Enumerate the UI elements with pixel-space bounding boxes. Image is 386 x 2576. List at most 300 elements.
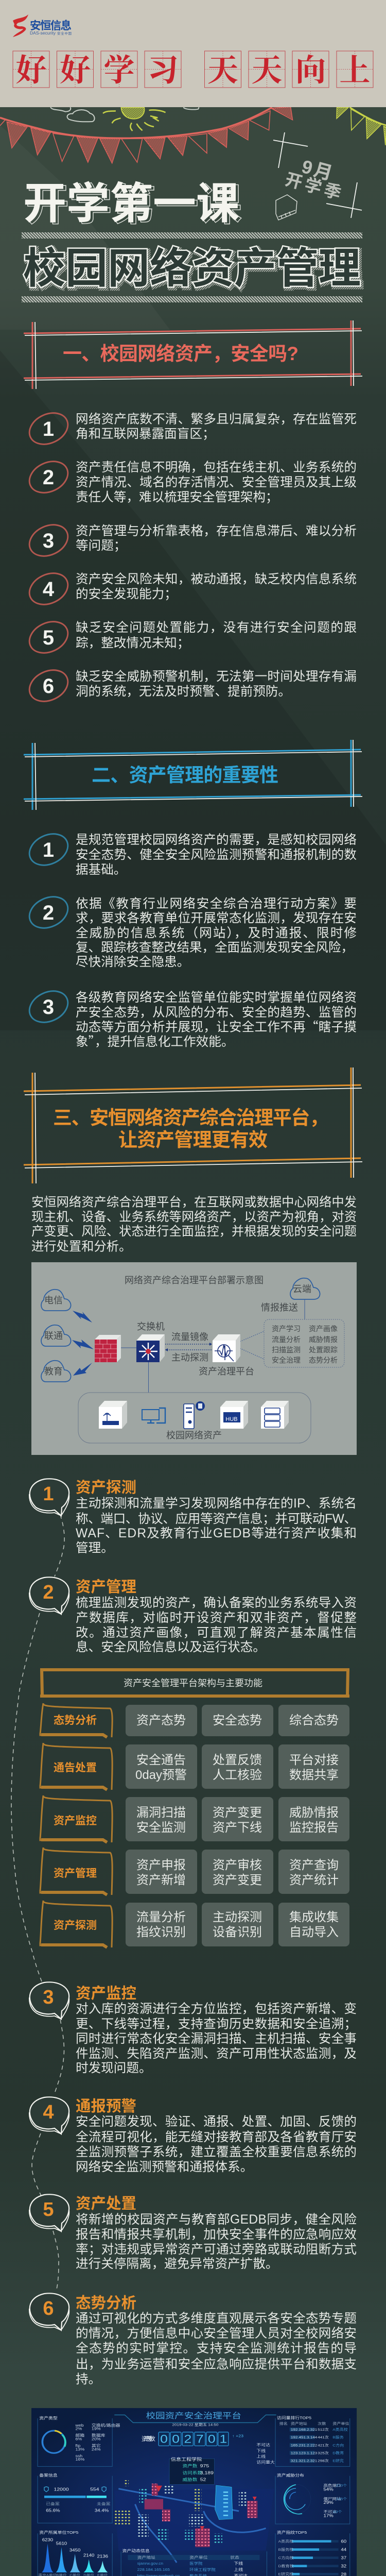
sun: [103, 107, 166, 131]
title banner: [114, 2411, 276, 2427]
item: 资产监控: [29, 1982, 357, 2075]
icon: speech bubble 5: 5: [43, 2199, 54, 2221]
icon: switch: [136, 1321, 165, 1362]
chalk divider bottom: [22, 296, 362, 302]
logo: 安恒信息: [30, 19, 72, 32]
map legend: 访问量大: [256, 2460, 275, 2464]
title: 校园网络资产管理: 校园网络资产管理: [23, 245, 361, 292]
item: 资产探测: 管理。: [76, 1541, 114, 1555]
item 6: 洞的系统，无法及时预警、提前预防。: [76, 684, 291, 699]
panel: visits top 5: [275, 2415, 350, 2466]
panel: filing info: 备案信息: [39, 2473, 58, 2478]
icon: desktop PC: [142, 1408, 165, 1423]
map legend: 不可达: [256, 2443, 270, 2447]
asset counter: 0: [172, 2433, 180, 2446]
intro text: [31, 1195, 357, 1254]
panel: filing info: 34.4%: [95, 2508, 109, 2513]
item: 态势分析: 的情况，方便信息中心安全管理人员对全校网络安: [76, 2326, 357, 2341]
item: 资产监控: 资产监控: [76, 1985, 136, 2002]
item: 资产处置: 报告和情报共享机制，加快安全事件的应急响应效: [76, 2227, 357, 2242]
panel: fingerprint top 5: 32: [341, 2564, 346, 2568]
panel: asset types: 16%: [75, 2458, 84, 2462]
panel: asset types: ftp: [75, 2444, 81, 2448]
row: 资产监控: 监控报告: [289, 1821, 339, 1835]
intro text: 产变更、风险、状态进行全面监控，并根据发现的安全问题: [31, 1225, 357, 1239]
item: 通报预警: 全监测预警子系统，建立覆盖全校重要信息系统的: [76, 2145, 357, 2159]
item: 通报预警: 全流程可视化，能无缝对接教育部及各省教育厅安: [76, 2130, 357, 2144]
slogan grid: 上: [340, 46, 371, 90]
popup card: 信息工程学院: [171, 2456, 202, 2462]
item 1: 是规范管理校园网络资产的需要，是感知校园网络: [76, 833, 357, 847]
slogan grid: [13, 46, 373, 90]
season badge with chalk crosses: [273, 132, 362, 220]
item 1: 网络资产底数不清、繁多且归属复杂，存在监管死: [76, 412, 357, 427]
panel: filing info: 已备案: [46, 2501, 60, 2506]
item 4: 4: [43, 578, 55, 601]
panel: asset activity table: sjanrw.gov.cn: [137, 2562, 163, 2566]
top paper band: [0, 0, 386, 107]
panel: visits top 5: B服务: [332, 2435, 344, 2439]
panel: filing info: 65.6%: [46, 2508, 60, 2513]
panel: threat distribution: 资产威胁分布: [277, 2473, 304, 2478]
icon: hub: [220, 1401, 248, 1429]
panel: fingerprint top 5: C方向校: [278, 2556, 294, 2560]
icon: wireless router: [99, 1401, 127, 1429]
panel: asset types: 24%: [92, 2447, 101, 2451]
item 1: [24, 407, 357, 450]
chalk divider top: [22, 232, 362, 239]
panel: threat distribution: [275, 2473, 350, 2524]
icon: speech bubble 3: [29, 1982, 69, 2019]
panel: unit top 5: 6230: [42, 2537, 53, 2542]
item 2: 复、跟踪核查整改结果，全面监测发现安全风险，: [76, 940, 354, 955]
icon: speech bubble 5: [29, 2194, 69, 2231]
row: 资产管理: 资产审核: [213, 1858, 262, 1872]
item: 资产处置: 将新增的校园资产与教育部GEDB同步，健全风险: [76, 2212, 357, 2227]
row: 态势分析: 安全态势: [213, 1714, 262, 1727]
icon: pointing hand: [276, 195, 297, 220]
panel: fingerprint top 5: 44: [341, 2547, 346, 2552]
item: 资产处置: 资产处置: [76, 2195, 136, 2212]
item: 态势分析: 全态势的实时掌控。支持安全监测统计报告的导: [76, 2341, 357, 2355]
item: 资产监控: 对入库的资源进行全方位监控，包括资产新增、变: [76, 2002, 357, 2016]
title: 校园网络资产管理: 校园网络资产管理: [25, 247, 362, 294]
panel: threat distribution: 145个: [336, 2497, 347, 2501]
row: 资产监控: 资产变更: [213, 1806, 262, 1820]
chart: deployment diagram: [31, 1262, 357, 1455]
red pennants: [0, 107, 292, 163]
icon: asset platform: 资产治理平台: [199, 1366, 254, 1377]
panel: visits top 5: 资产单位: [332, 2421, 349, 2426]
slogan grid: 天: [251, 46, 282, 90]
asset counter: 0: [160, 2433, 168, 2446]
icon: speech bubble 2: [29, 1577, 69, 1614]
item: 资产管理: 息、安全风险信息以及运行状态。: [76, 1640, 266, 1654]
heading: section 1: 一、校园网络资产，安全吗?: [63, 343, 299, 364]
panel: threat distribution: 54%: [324, 2487, 334, 2492]
row: 态势分析: [40, 1703, 349, 1737]
campus assets group: [78, 1393, 311, 1443]
panel: fingerprint top 5: 资产指纹TOP5: [277, 2530, 307, 2535]
slogan grid: 好: [60, 46, 91, 90]
title banner: 2019-03-22 星期五 14:50: [172, 2422, 218, 2427]
row: 资产探测: [40, 1901, 349, 1947]
icon: speech bubble 3: 3: [43, 1987, 54, 2008]
panel: asset activity table: 资产地址: [137, 2555, 155, 2560]
title: 开学第一课: 开学第一课: [23, 179, 239, 228]
panel: unit top 5: 5610: [56, 2541, 67, 2546]
item: 资产管理: 产数据库，对临时开设资产和双非资产，督促整: [76, 1611, 357, 1625]
slogan grid: 学: [104, 46, 135, 90]
dashed timeline: [11, 1515, 64, 2292]
item 2: [24, 891, 357, 969]
city view: [114, 2480, 274, 2563]
icon: speech bubble 1: [29, 1479, 69, 1516]
panel: fingerprint top 5: D教育校: [278, 2564, 294, 2568]
red string: [0, 107, 272, 138]
item 3: 等问题；: [76, 538, 126, 553]
popup card: [169, 2456, 215, 2484]
panel: asset activity table: 资产动态信息: [122, 2548, 150, 2553]
cloud labels: 电信: [44, 1295, 63, 1306]
panel: visits top 5: C方向: [332, 2443, 344, 2447]
item 2: 2: [43, 902, 54, 924]
row: 通告处置: 通告处置: [54, 1762, 97, 1774]
popup card: 3,189: [200, 2470, 214, 2476]
item: 态势分析: 持。: [76, 2372, 101, 2386]
row: 通告处置: 0day预警: [135, 1768, 187, 1782]
panel: unit top 5: 2136: [97, 2554, 108, 2558]
popup card: 975: [200, 2464, 209, 2469]
row: 资产探测: 设备识别: [213, 1925, 262, 1939]
logo: [13, 14, 72, 37]
item: 态势分析: 态势分析: [76, 2295, 136, 2312]
item: 态势分析: 通过可视化的方式多维度直观展示各安全态势专题: [76, 2311, 357, 2326]
panel: threat distribution: 不可达: [324, 2509, 337, 2514]
row: 资产管理: [40, 1848, 349, 1895]
panel: asset types: 数据库: [92, 2433, 105, 2437]
item 3: [24, 519, 357, 562]
heading frame: section 3: [24, 1067, 362, 1183]
panel: unit top 5: 资产所属单位TOP5: [39, 2530, 79, 2535]
item: 资产管理: 梳理监测发现的资产，确认备案的业务系统导入资: [76, 1596, 357, 1610]
panel: asset activity table: 环境工程学院: [189, 2567, 216, 2572]
item 2: 2: [43, 466, 54, 489]
feature box: 扫描监测: [272, 1346, 301, 1354]
logo: 安全中国: [57, 31, 72, 36]
item 1: 据基础。: [76, 862, 126, 877]
item 2: 资产责任信息不明确，包括在线主机、业务系统的: [76, 460, 357, 474]
feature box: 处置跟踪: [309, 1346, 338, 1354]
item 2: [24, 455, 357, 504]
title: 开学第一课: 开学第一课: [26, 181, 242, 229]
panel: threat distribution: 高危端口: [324, 2483, 341, 2487]
panel: asset activity table: 医学院: [189, 2561, 203, 2566]
item 2: 依据《教育行业网络安全综合治理行动方案》要: [76, 896, 357, 911]
row: 资产管理: 资产变更: [213, 1873, 262, 1887]
panel: asset types: web: [75, 2424, 84, 2428]
icon: speech bubble 6: [29, 2293, 69, 2330]
feature box: 资产学习: [272, 1325, 301, 1333]
popup card: 访问系数: [182, 2470, 202, 2475]
panel: visits top 5: 192.168.2.321: [291, 2428, 317, 2432]
heading frame: section 2: [24, 740, 362, 810]
item: 资产探测: 主动探测和流量学习发现网络中存在的IP、系统名: [76, 1496, 357, 1511]
item 1: [24, 828, 357, 877]
item: 通报预警: 通报预警: [76, 2098, 136, 2115]
row: 资产探测: 主动探测: [213, 1910, 262, 1924]
panel: fingerprint top 5: B服务校: [278, 2548, 294, 2552]
row: 资产管理: 资产新增: [136, 1873, 186, 1887]
panel: visits top 5: 298次: [318, 2459, 329, 2463]
icon: asset platform: [199, 1334, 254, 1377]
item 3: 产安全态势，从风险的分布、安全的趋势、监管的: [76, 1005, 357, 1020]
row: 资产管理: 资产统计: [289, 1873, 339, 1887]
slogan grid: 向: [295, 46, 326, 90]
panel: asset activity table: 资产单位: [189, 2555, 208, 2560]
row: 资产管理: 资产管理: [54, 1868, 97, 1879]
heading: section 3: 让资产管理更有效: [118, 1129, 268, 1150]
panel: visits top 5: 441次: [318, 2435, 329, 2439]
heading: section 2: 二、资产管理的重要性: [92, 765, 278, 786]
item: 资产探测: 称、端口、协议、应用等资产信息；并可联动FW、: [76, 1512, 357, 1526]
chart: deployment diagram: 网络资产综合治理平台部署示意图: [125, 1275, 264, 1285]
icon: lightning bolts: [72, 1311, 94, 1376]
row: 资产监控: 威胁情报: [289, 1806, 339, 1820]
clouds: [50, 107, 199, 122]
panel: fingerprint top 5: [275, 2530, 350, 2576]
icon: speech bubble 4: 4: [43, 2102, 54, 2123]
row: 通告处置: 数据共享: [289, 1768, 339, 1782]
panel: visits top 5: 123.123.1.123: [291, 2451, 317, 2455]
icon: hub: HUB: [225, 1416, 238, 1422]
item: 通报预警: 安全问题发现、验证、通报、处置、加固、反馈的: [76, 2114, 357, 2129]
item 3: 资产管理与分析靠表格，存在信息滞后、难以分析: [76, 523, 357, 538]
panel: architecture table: [40, 1670, 349, 1947]
cloud labels: 教育: [44, 1366, 63, 1377]
panel: asset types: 20%: [92, 2437, 101, 2441]
item: 资产探测: WAF、EDR及教育行业GEDB等进行资产收集和: [76, 1526, 357, 1540]
feature box: [264, 1319, 344, 1367]
item 2: 责任人等，难以梳理安全管理架构；: [76, 490, 278, 504]
item: 态势分析: 出，为业务运营和安全应急响应提供平台和数据支: [76, 2357, 357, 2371]
panel: visits top 5: 192.451.3.144: [291, 2435, 317, 2439]
panel: visits top 5: 325次: [318, 2451, 329, 2455]
item 5: [24, 616, 357, 659]
heading: section 3: [53, 1107, 328, 1150]
map legend: [256, 2443, 275, 2464]
panel: visits top 5: 421次: [318, 2443, 329, 2447]
item 2: 资产情况、域名的存活情况、安全管理员及其上级: [76, 475, 357, 489]
row: 态势分析: 综合态势: [289, 1714, 339, 1727]
item 3: 3: [43, 996, 54, 1019]
icon: speech bubble 4: [29, 2097, 69, 2134]
panel: asset types: 6%: [75, 2437, 82, 2441]
traffic labels: 流量镜像: [171, 1332, 208, 1342]
table header: 资产安全管理平台架构与主要功能: [124, 1678, 262, 1688]
heading frame: section 1: [24, 320, 362, 389]
item 3: 各级教育网络安全监管单位能实时掌握单位网络资: [76, 990, 357, 1005]
asset counter: 2: [184, 2433, 191, 2446]
chalkboard diagonal shading: [0, 125, 386, 1030]
panel: asset activity table: 状态: [230, 2555, 239, 2560]
item 6: [24, 664, 357, 707]
panel: filing info: 12000: [54, 2487, 69, 2492]
item: 资产管理: 资产管理: [76, 1579, 136, 1596]
slogan grid: 习: [147, 46, 178, 90]
panel: visits top 5: 资产地址: [291, 2421, 308, 2426]
item 5: 5: [43, 626, 54, 649]
icon: speech bubble 1: 1: [43, 1483, 54, 1505]
panel: threat distribution: 僵尸网站: [324, 2496, 341, 2501]
item: 资产探测: [29, 1479, 357, 1555]
icon: server tower: [184, 1401, 205, 1429]
panel: asset types: 19%: [92, 2427, 101, 2431]
panel: visits top 5: 512次: [318, 2428, 329, 2432]
panel: asset types: [38, 2416, 120, 2466]
traffic labels: [171, 1332, 208, 1363]
item 5: 缺乏安全问题处置能力，没有进行安全问题的跟: [76, 620, 357, 635]
item 5: 踪，整改情况未知；: [76, 636, 189, 650]
title banner: 校园资产安全治理平台: [146, 2411, 241, 2420]
panel: fingerprint top 5: A类高校: [278, 2539, 294, 2544]
item: 资产监控: 同时进行常态化安全漏洞扫描、主机扫描、安全事: [76, 2031, 357, 2046]
item 4: 的安全发现能力；: [76, 587, 177, 601]
panel: filing info: [38, 2473, 112, 2523]
row: 资产管理: 资产申报: [136, 1858, 186, 1872]
panel: visits top 5: D教育: [332, 2451, 344, 2455]
panel: asset activity table: 228.184.165.165: [137, 2568, 170, 2572]
icon: rack server: [261, 1401, 289, 1429]
feature box: 安全治理: [272, 1356, 301, 1364]
icon: speech bubble 2: 2: [43, 1582, 54, 1603]
yellow pennants: [337, 107, 386, 145]
item 2: 全威胁的信息系统（网站），及时通报、限时修: [76, 926, 357, 940]
icon: switch: 交换机: [137, 1321, 165, 1332]
feature box: 流量分析: [272, 1335, 301, 1344]
asset counter: ↑ +23: [232, 2434, 244, 2438]
logo: DAS-security: [30, 30, 56, 36]
item 1: 角和互联网暴露面盲区；: [76, 427, 215, 441]
row: 资产探测: 自动导入: [289, 1925, 339, 1939]
intro text: 安恒网络资产综合治理平台，在互联网或数据中心网络中发: [31, 1195, 357, 1210]
panel: visits top 5: 访问量排行TOP5: [277, 2415, 312, 2420]
table header: [40, 1670, 349, 1696]
item: 资产处置: 进行关停隔离，避免异常资产扩散。: [76, 2257, 278, 2271]
cloud labels: [44, 1284, 311, 1377]
feature box: 威胁情报: [309, 1335, 338, 1344]
icon: firewall: [95, 1335, 121, 1362]
row: 资产监控: 资产下线: [213, 1821, 262, 1835]
panel: visits top 5: E研究: [332, 2459, 344, 2463]
panel: asset types: 13%: [75, 2447, 84, 2451]
row: 通告处置: 安全通告: [136, 1753, 186, 1767]
slogan grid: 天: [207, 46, 238, 90]
row: 通告处置: 处置反馈: [213, 1753, 262, 1767]
panel: visits top 5: 次数: [318, 2421, 326, 2426]
row: 资产探测: 流量分析: [136, 1910, 186, 1924]
season text: 9月: [300, 156, 335, 184]
panel: section 1 risks: [24, 320, 362, 707]
item: 资产监控: 更、下线等过程，支持查询历史数据和安全追溯；: [76, 2016, 357, 2031]
asset counter: 0: [208, 2433, 216, 2446]
feature box: 态势分析: [309, 1356, 338, 1364]
row: 通告处置: 人工核验: [213, 1768, 262, 1782]
item: 资产处置: 率；对违规或异常资产可通过旁路或联动阻断方式: [76, 2242, 357, 2257]
panel: asset types: 其它: [92, 2443, 101, 2448]
slogan grid: 好: [15, 46, 46, 90]
panel: threat distribution: 270个: [336, 2483, 347, 2487]
campus assets group: 校园网络资产: [166, 1430, 222, 1440]
row: 资产探测: 指纹识别: [136, 1925, 186, 1939]
panel: visits top 5: 165.231.2.222: [291, 2443, 317, 2447]
item 6: 缺乏安全威胁预警机制，无法第一时间处理存有漏: [76, 669, 357, 684]
panel: section 2 importance: [24, 740, 362, 1050]
panel: visits top 5: 321.321.2.321: [291, 2459, 317, 2463]
traffic labels: 主动探测: [171, 1352, 208, 1363]
season text: 开学季: [283, 170, 343, 202]
panel: threat distribution: 17%: [324, 2513, 334, 2518]
asset counter: 资产总数: [142, 2435, 156, 2442]
panel: asset types: 交换机/路由器: [92, 2423, 120, 2428]
row: 通告处置: 平台对接: [289, 1753, 339, 1767]
row: 通告处置: [40, 1743, 349, 1790]
item 1: 1: [43, 839, 54, 861]
row: 资产监控: 漏洞扫描: [136, 1806, 186, 1820]
item 1: 1: [43, 418, 54, 440]
item: 资产监控: 件监测、失陷资产监测、资产可用性状态监测，及: [76, 2046, 357, 2061]
bunting, sun and clouds: [0, 107, 386, 163]
panel: threat distribution: 29%: [324, 2500, 334, 2505]
item 3: [24, 985, 357, 1050]
item 3: 象”，提升信息化工作效能。: [76, 1031, 234, 1050]
row: 资产监控: 安全监测: [136, 1821, 186, 1835]
panel: asset types: 资产类型: [39, 2416, 58, 2420]
asset counter: 7: [196, 2433, 204, 2446]
panel: fingerprint top 5: 60: [341, 2539, 346, 2544]
row: 资产监控: 资产监控: [54, 1815, 97, 1827]
item: 资产管理: [29, 1577, 357, 1654]
item 3: 动态等方面分析并展现，让安全工作不再“瞎子摸: [76, 1017, 357, 1036]
row: 态势分析: 态势分析: [54, 1714, 97, 1726]
heading: section 3: 三、安恒网络资产综合治理平台，: [53, 1107, 328, 1128]
panel: asset activity table: [121, 2548, 267, 2576]
item: 资产探测: 资产探测: [76, 1479, 136, 1496]
item 2: 求，要求各教育单位开展常态化监测，发现存在安: [76, 911, 357, 925]
map legend: 下线: [256, 2448, 266, 2453]
panel: asset types: 邮箱: [75, 2433, 84, 2437]
feature box: 资产画像: [309, 1325, 338, 1333]
panel: asset types: ssh: [75, 2454, 82, 2458]
panel: filing info: 554: [90, 2487, 99, 2492]
chart: security dashboard screenshot: [31, 2408, 357, 2576]
asset counter: 1: [219, 2433, 227, 2446]
item: 态势分析: [29, 2293, 357, 2386]
item 4: 资产安全风险未知，被动通报，缺乏校内信息系统: [76, 572, 357, 586]
intro text: 现主机、设备、业务系统等网络资产，以资产为视角，对资: [31, 1210, 357, 1224]
item 1: 安全态势、健全安全风险监测预警和通报机制的数: [76, 848, 357, 862]
connector lines: [120, 1299, 305, 1393]
panel: asset activity table: 上线: [234, 2567, 243, 2572]
row: 资产探测: 资产探测: [54, 1920, 97, 1931]
item 3: 3: [43, 530, 54, 552]
item 6: 6: [43, 675, 54, 698]
panel: unit top 5: 2140: [83, 2553, 94, 2557]
item: 资产监控: 时发现问题。: [76, 2061, 152, 2075]
panel: filing info: 未备案: [97, 2501, 111, 2506]
popup card: 威胁数: [182, 2477, 198, 2482]
popup card: 资产数: [182, 2463, 198, 2468]
